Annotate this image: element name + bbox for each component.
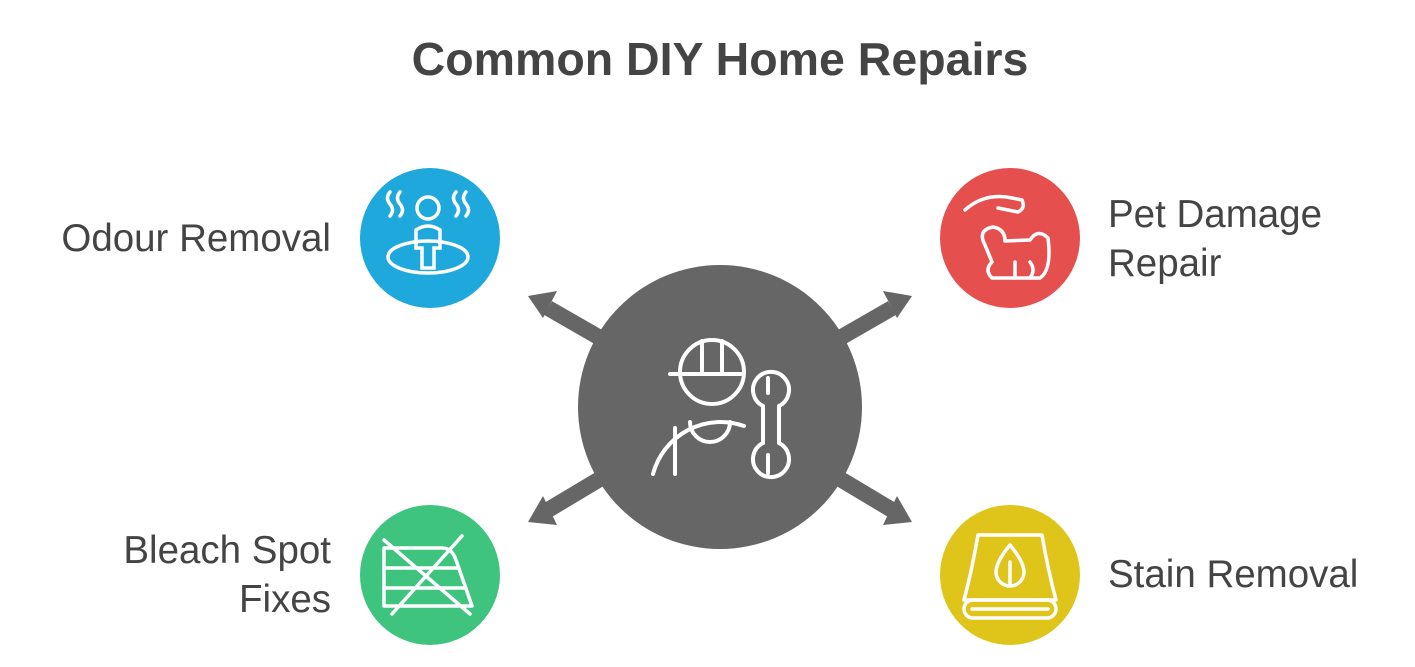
center circle with worker icon — [578, 265, 862, 549]
label: bleach spot fixes: Bleach Spot — [123, 529, 331, 572]
title: Common DIY Home Repairs — [412, 33, 1028, 85]
label: pet damage repair — [1108, 193, 1322, 285]
label: pet damage repair: Repair — [1108, 242, 1221, 285]
icon: bleach spot — [360, 505, 500, 645]
icon: odour removal — [360, 168, 500, 308]
label: odour removal: Odour Removal — [61, 217, 331, 260]
arrows — [528, 291, 912, 525]
icon: stain removal — [940, 505, 1080, 645]
icon: pet damage — [940, 168, 1080, 308]
label: pet damage repair: Pet Damage — [1108, 193, 1322, 236]
label: bleach spot fixes — [123, 529, 331, 621]
label: bleach spot fixes: Fixes — [239, 578, 331, 621]
label: stain removal: Stain Removal — [1108, 553, 1358, 596]
